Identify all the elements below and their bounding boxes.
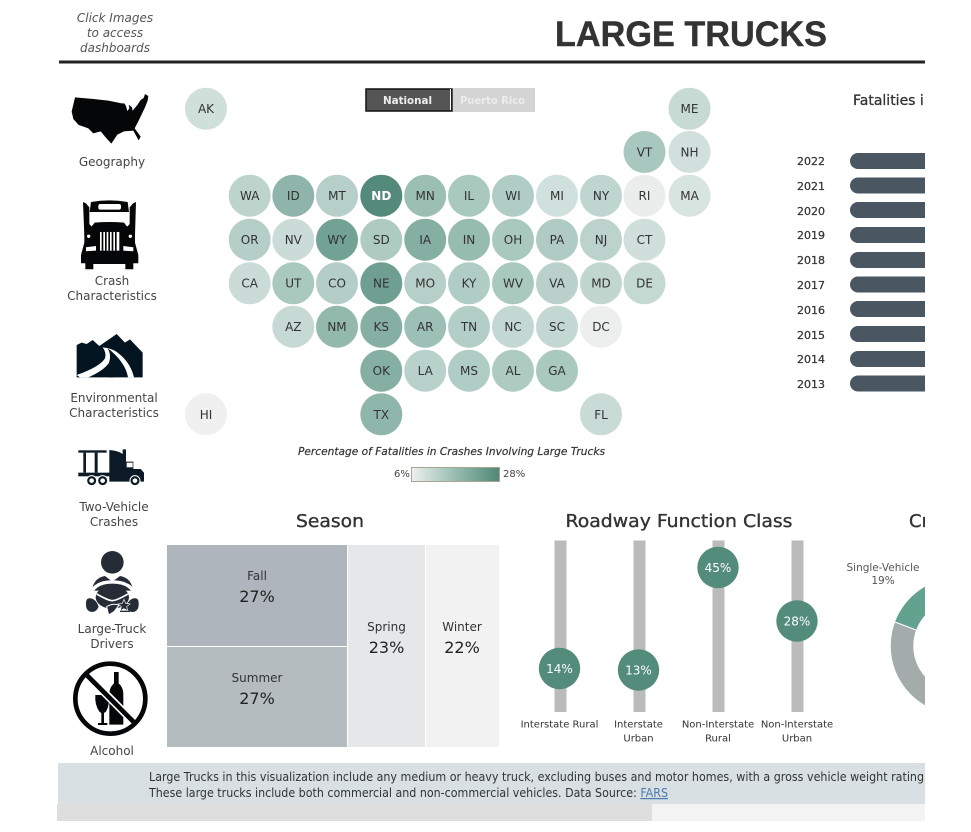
navigation: environmental characteristics: Characteristics <box>69 406 159 420</box>
treemap cell: winter <box>426 545 499 747</box>
treemap cell: winter: 22% <box>444 638 480 657</box>
bar: 2014: 2014 <box>797 353 825 366</box>
state: DC: DC <box>592 320 610 334</box>
slider: non-interstate urban <box>761 540 833 744</box>
bar: 2016: 2016 <box>797 304 825 317</box>
state: CA: CA <box>241 277 259 291</box>
state: NC: NC <box>504 320 522 334</box>
heading: season: Season <box>296 511 364 532</box>
treemap cell: summer: 27% <box>239 689 275 708</box>
navigation: large-truck drivers: Drivers <box>90 637 134 651</box>
title: LARGE TRUCKS <box>555 15 827 54</box>
state: OK: OK <box>373 364 391 378</box>
bar: 2022: 2022 <box>797 155 825 168</box>
state: RI <box>624 175 666 217</box>
state: TX: TX <box>373 408 389 422</box>
state: OR: OR <box>241 233 259 247</box>
state: CO: CO <box>328 277 346 291</box>
state: MN: MN <box>416 189 435 203</box>
label: single-vehicle <box>846 562 920 587</box>
navigation: geography <box>72 94 148 169</box>
state: FL: FL <box>594 408 608 422</box>
state: AL: AL <box>506 364 521 378</box>
state: ID <box>272 175 314 217</box>
note: click images: Click Images <box>77 11 153 25</box>
state: MN <box>404 175 446 217</box>
icon: mountain road <box>77 334 143 377</box>
bar: 2018: 2018 <box>797 254 825 267</box>
state: AZ: AZ <box>285 320 302 334</box>
state: GA <box>536 350 578 392</box>
bar: 2013: 2013 <box>797 378 825 391</box>
state: AR: AR <box>417 320 433 334</box>
navigation: large-truck drivers: Large-Truck <box>78 622 146 636</box>
map legend: 6% <box>394 469 410 480</box>
navigation: crash characteristics: Characteristics <box>67 289 157 303</box>
state: OR <box>229 219 271 261</box>
state: OH: OH <box>504 233 522 247</box>
state: NH <box>668 131 710 173</box>
treemap cell: fall: Fall <box>247 569 267 583</box>
state: CT: CT <box>637 233 653 247</box>
map legend <box>298 445 605 482</box>
state: LA <box>404 350 446 392</box>
state: VT: VT <box>637 146 653 160</box>
note: click images: dashboards <box>80 41 150 55</box>
state: OK <box>360 350 402 392</box>
donut chart <box>895 578 971 703</box>
state: KY <box>448 262 490 304</box>
state: IN: IN <box>463 233 475 247</box>
state: MI <box>536 175 578 217</box>
state: KY: KY <box>462 277 477 291</box>
state: NE: NE <box>373 277 390 291</box>
label: single-vehicle: 19% <box>871 575 895 587</box>
slider: non-interstate urban: 28% <box>784 614 810 628</box>
footer note: Large Trucks in this visualization include any medium or heavy truck, excluding buses and motor homes, with a gross vehicle weight rating <box>149 770 924 784</box>
state: NJ <box>580 219 622 261</box>
bar: 2021 <box>797 178 960 194</box>
state: WV <box>492 262 534 304</box>
state: SD <box>360 219 402 261</box>
navigation: environmental characteristics <box>69 334 159 420</box>
state: DE <box>624 262 666 304</box>
bar: 2017 <box>797 276 960 292</box>
state: NY <box>580 175 622 217</box>
state: NY: NY <box>593 189 610 203</box>
bar: 2018 <box>797 252 960 268</box>
bar: 2017: 2017 <box>797 279 825 292</box>
state: NH: NH <box>680 146 698 160</box>
state: ND: ND <box>371 189 391 203</box>
navigation: alcohol <box>75 664 145 758</box>
state: NE <box>360 262 402 304</box>
navigation: alcohol: Alcohol <box>90 744 134 758</box>
navigation: crash characteristics: Crash <box>95 274 129 288</box>
state: ME <box>668 88 710 130</box>
state: MS: MS <box>460 364 478 378</box>
state: CA <box>229 262 271 304</box>
state: MD: MD <box>591 277 611 291</box>
heading: roadway function class: Roadway Function Class <box>566 511 792 532</box>
state: MA: MA <box>680 189 700 203</box>
state: PA: PA <box>550 233 565 247</box>
treemap cell: fall <box>167 545 347 646</box>
state: SD: SD <box>373 233 390 247</box>
navigation: crash characteristics <box>67 200 157 303</box>
state: OH <box>492 219 534 261</box>
state: MD <box>580 262 622 304</box>
state: NC <box>492 306 534 348</box>
state: MI: MI <box>550 189 564 203</box>
bar: 2019 <box>797 227 960 243</box>
slider: interstate rural: Interstate Rural <box>521 720 598 730</box>
state: SC <box>536 306 578 348</box>
state: IL: IL <box>464 189 474 203</box>
icon: no alcohol <box>75 664 145 734</box>
state tile map <box>185 88 710 435</box>
state: PA <box>536 219 578 261</box>
footer note: These large trucks include both commercial and non-commercial vehicles. Data Source: FARS <box>148 786 668 800</box>
icon: driver with wheel <box>86 551 139 615</box>
slider: interstate rural: 14% <box>546 662 573 676</box>
state: VA <box>536 262 578 304</box>
navigation: two-vehicle crashes: Crashes <box>90 515 138 529</box>
toggle: national / puerto rico: National <box>383 94 432 107</box>
state: TN: TN <box>460 320 477 334</box>
panel: crash type donut <box>846 511 971 703</box>
state: AK: AK <box>198 102 215 116</box>
treemap cell: summer: Summer <box>232 671 283 685</box>
treemap cell: summer <box>167 647 347 747</box>
state: LA: LA <box>418 364 434 378</box>
slider: non-interstate rural: 45% <box>705 561 731 575</box>
state: AR <box>404 306 446 348</box>
state: WI: WI <box>505 189 521 203</box>
state: IL <box>448 175 490 217</box>
bar: 2016 <box>797 301 960 317</box>
icon: truck front <box>81 200 138 269</box>
slider: non-interstate urban: Non-Interstate <box>761 720 833 730</box>
slider: non-interstate rural <box>682 540 754 744</box>
state: TX <box>360 393 402 435</box>
treemap cell: spring: Spring <box>367 620 406 634</box>
state: AK <box>185 88 227 130</box>
state: MT <box>316 175 358 217</box>
state: MS <box>448 350 490 392</box>
state: FL <box>580 393 622 435</box>
state: WV: WV <box>503 277 524 291</box>
navigation: large-truck drivers <box>78 551 146 651</box>
slider: interstate urban: Interstate <box>614 720 663 730</box>
bar: 2022 <box>797 153 960 169</box>
label: single-vehicle: Single-Vehicle <box>846 562 920 574</box>
bar: 2013 <box>797 376 960 392</box>
state: CO <box>316 262 358 304</box>
treemap cell: spring: 23% <box>369 638 404 657</box>
state: MA <box>668 175 710 217</box>
state: AL <box>492 350 534 392</box>
state: WA <box>229 175 271 217</box>
state: NM <box>316 306 358 348</box>
state: ME: ME <box>681 102 698 116</box>
navigation: two-vehicle crashes: Two-Vehicle <box>78 500 149 514</box>
state: HI <box>185 393 227 435</box>
state: WY <box>316 219 358 261</box>
navigation: geography: Geography <box>79 155 145 169</box>
note: click images <box>77 12 153 52</box>
chart: fatalities by year <box>797 93 971 392</box>
state: UT: UT <box>285 277 302 291</box>
slider: interstate urban: 13% <box>625 664 652 678</box>
state: NJ: NJ <box>595 233 607 247</box>
slider: interstate urban: Urban <box>623 734 654 744</box>
state: NV <box>272 219 314 261</box>
bar: 2019: 2019 <box>797 229 825 242</box>
state: WY: WY <box>327 233 347 247</box>
state: WI <box>492 175 534 217</box>
state: IA <box>404 219 446 261</box>
navigation: two-vehicle crashes <box>78 449 149 529</box>
bar: 2014 <box>797 351 960 367</box>
slider: non-interstate rural: Non-Interstate <box>682 720 754 730</box>
state: DE: DE <box>636 277 653 291</box>
state: IN <box>448 219 490 261</box>
state: DC <box>580 306 622 348</box>
state: CT <box>624 219 666 261</box>
slider: interstate rural <box>521 540 598 730</box>
state: MO: MO <box>415 277 435 291</box>
toggle: national / puerto rico <box>366 88 535 112</box>
state: IA: IA <box>419 233 432 247</box>
map legend: 28% <box>503 469 525 480</box>
state: MO <box>404 262 446 304</box>
state: HI: HI <box>200 408 212 422</box>
state: ID: ID <box>287 189 300 203</box>
icon: side truck <box>78 449 144 486</box>
treemap cell: winter: Winter <box>442 620 482 634</box>
note: click images: to access <box>87 26 143 40</box>
state: VT <box>624 131 666 173</box>
footer note <box>57 763 925 821</box>
slider: non-interstate urban: Urban <box>782 734 812 744</box>
state: GA: GA <box>548 364 567 378</box>
state: KS: KS <box>374 320 389 334</box>
state: SC: SC <box>549 320 565 334</box>
panel: season <box>167 511 499 747</box>
bar: 2021: 2021 <box>797 180 825 193</box>
state: NM: NM <box>327 320 347 334</box>
bar: 2020: 2020 <box>797 205 825 218</box>
toggle: national / puerto rico: Puerto Rico <box>460 94 525 107</box>
treemap cell: fall: 27% <box>239 587 275 606</box>
state: UT <box>272 262 314 304</box>
slider: interstate urban <box>614 540 663 744</box>
state: TN <box>448 306 490 348</box>
icon: US map <box>72 94 148 144</box>
treemap cell: spring <box>348 545 425 747</box>
state: RI: RI <box>639 189 650 203</box>
state: VA: VA <box>549 277 566 291</box>
state: ND <box>360 175 402 217</box>
bar: 2015 <box>797 326 960 342</box>
state: WA: WA <box>240 189 260 203</box>
state: NV: NV <box>285 233 303 247</box>
panel: roadway function class <box>521 511 833 744</box>
state: KS <box>360 306 402 348</box>
slider: non-interstate rural: Rural <box>705 734 731 744</box>
bar: 2020 <box>797 202 960 218</box>
state: MT: MT <box>328 189 347 203</box>
state: AZ <box>272 306 314 348</box>
navigation: environmental characteristics: Environmental <box>70 391 158 405</box>
map legend: Percentage of Fatalities in Crashes Involving Large Trucks <box>298 445 605 458</box>
bar: 2015: 2015 <box>797 329 825 342</box>
